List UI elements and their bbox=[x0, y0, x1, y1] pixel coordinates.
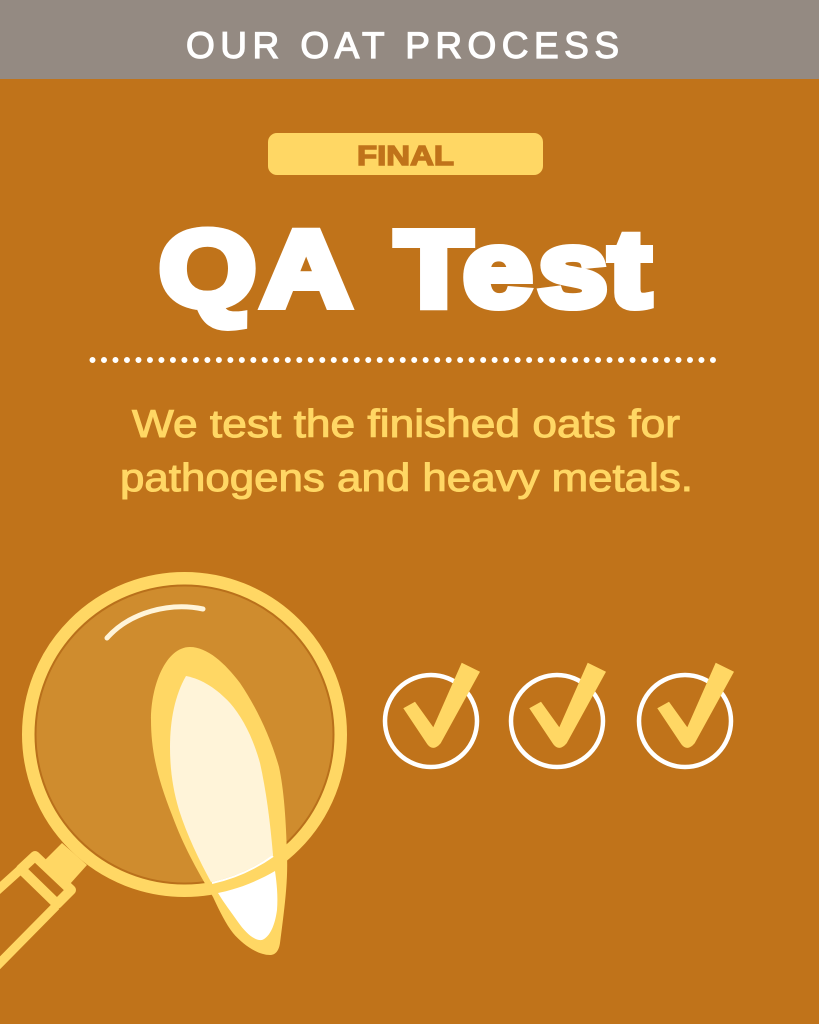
icon: magnifying glass with oat bbox=[0, 578, 340, 975]
icon: check mark 2 bbox=[511, 663, 606, 767]
lens bbox=[28, 578, 340, 890]
header band bbox=[0, 0, 819, 79]
lens highlight bbox=[107, 607, 203, 638]
description: We test the finished oats for bbox=[132, 403, 680, 446]
header band: OUR OAT PROCESS bbox=[186, 25, 619, 66]
icon: check mark 1 bbox=[385, 663, 480, 767]
magnifier handle bbox=[0, 843, 87, 975]
badge: final bbox=[268, 133, 543, 175]
title: QA Test bbox=[159, 208, 651, 329]
description bbox=[120, 403, 693, 500]
oat grain bbox=[151, 647, 287, 955]
description: pathogens and heavy metals. bbox=[120, 457, 693, 500]
icon: check mark 3 bbox=[639, 663, 734, 767]
badge: final: FINAL bbox=[357, 140, 454, 171]
